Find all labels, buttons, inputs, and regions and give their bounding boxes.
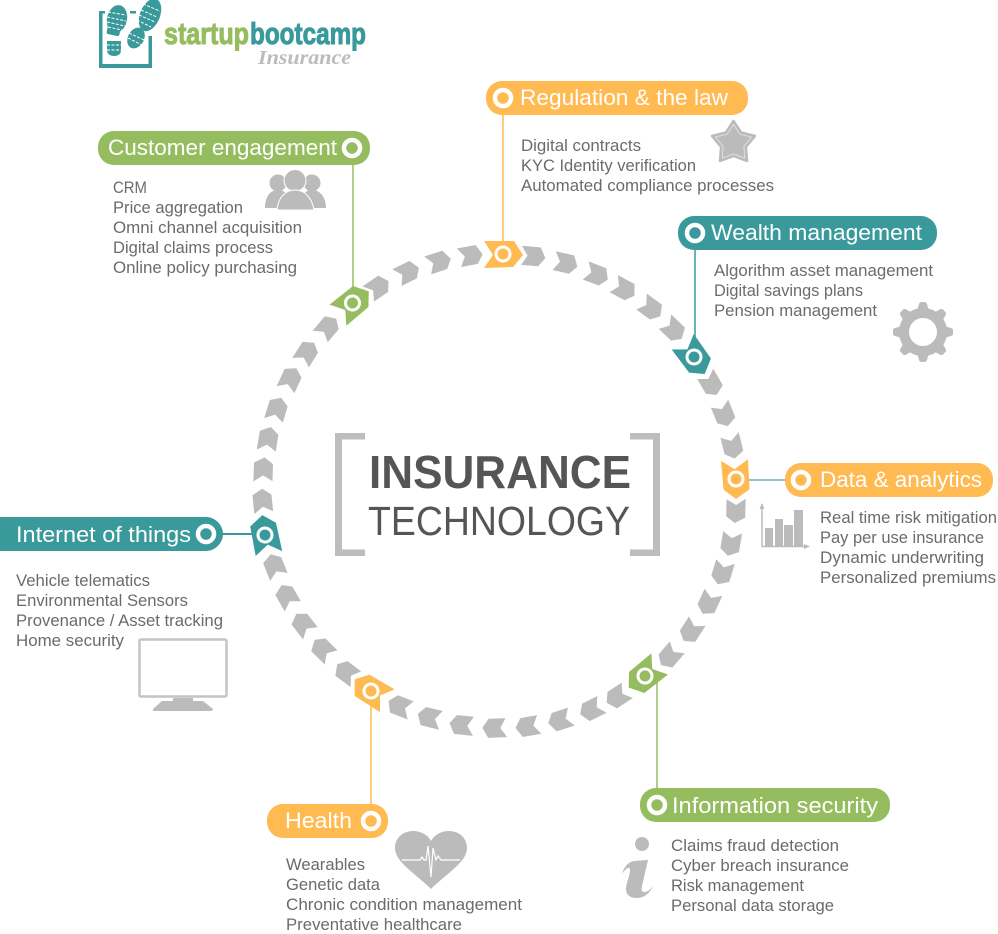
list bbox=[671, 836, 849, 915]
list: Digital savings plans bbox=[714, 281, 863, 300]
list bbox=[714, 261, 933, 320]
connector: data and analytics bbox=[742, 479, 790, 481]
list: Omni channel acquisition bbox=[113, 218, 302, 237]
logo wordmark startup: startup bbox=[164, 16, 249, 51]
pill heading: Information security bbox=[672, 793, 878, 818]
pill heading bbox=[678, 216, 937, 250]
pill heading: Internet of things bbox=[16, 522, 191, 547]
panel: information security bbox=[622, 788, 890, 915]
list: Algorithm asset management bbox=[714, 261, 933, 280]
ring marker: data and analytics bbox=[721, 459, 750, 500]
logo: startupbootcamp Insurance bbox=[99, 0, 366, 69]
pill heading bbox=[785, 463, 993, 497]
ring marker: customer engagement bbox=[330, 280, 377, 326]
pill heading bbox=[267, 804, 388, 838]
list bbox=[16, 571, 223, 650]
connector: wealth management bbox=[694, 245, 696, 345]
pill heading: Health bbox=[285, 808, 352, 833]
icon: info letter bbox=[622, 837, 653, 898]
list: Environmental Sensors bbox=[16, 591, 188, 610]
list bbox=[521, 136, 774, 195]
list: Home security bbox=[16, 631, 124, 650]
connector: internet of things bbox=[218, 533, 260, 535]
logo frame bbox=[99, 11, 152, 68]
pill heading: Customer engagement bbox=[108, 135, 337, 160]
pill heading bbox=[0, 517, 223, 551]
icon: bar chart bbox=[760, 503, 810, 549]
panel: wealth management bbox=[678, 216, 953, 362]
list: Automated compliance processes bbox=[521, 176, 774, 195]
icon: people bbox=[265, 170, 326, 210]
list: Genetic data bbox=[286, 875, 381, 894]
connector: customer engagement bbox=[352, 160, 354, 295]
ring marker: wealth management bbox=[672, 334, 716, 381]
circular chevron ring bbox=[252, 244, 747, 738]
list: Vehicle telematics bbox=[16, 571, 150, 590]
list: Digital claims process bbox=[113, 238, 273, 257]
list: Claims fraud detection bbox=[671, 836, 839, 855]
list: Real time risk mitigation bbox=[820, 508, 997, 527]
pill heading: Regulation & the law bbox=[520, 85, 728, 110]
list bbox=[820, 508, 997, 587]
list: Provenance / Asset tracking bbox=[16, 611, 223, 630]
list bbox=[113, 178, 302, 277]
list: Chronic condition management bbox=[286, 895, 522, 914]
ring marker: regulation bbox=[484, 241, 523, 268]
icon: heart with pulse bbox=[395, 831, 467, 889]
pill heading bbox=[98, 131, 370, 165]
pill heading bbox=[486, 81, 748, 115]
list: Cyber breach insurance bbox=[671, 856, 849, 875]
icon: monitor bbox=[140, 640, 226, 711]
list: CRM bbox=[113, 178, 147, 197]
title: TECHNOLOGY: TECHNOLOGY bbox=[368, 498, 630, 544]
list: Risk management bbox=[671, 876, 804, 895]
panel: data and analytics bbox=[760, 463, 997, 587]
left bracket bbox=[335, 433, 365, 556]
panel: customer engagement bbox=[98, 131, 370, 277]
list: KYC Identity verification bbox=[521, 156, 696, 175]
list: Pension management bbox=[714, 301, 877, 320]
panel: health bbox=[267, 804, 522, 934]
list: Price aggregation bbox=[113, 198, 243, 217]
list: Dynamic underwriting bbox=[820, 548, 984, 567]
logo subtitle Insurance: Insurance bbox=[257, 47, 351, 69]
logo wordmark bootcamp: bootcamp bbox=[250, 16, 366, 51]
list: Preventative healthcare bbox=[286, 915, 462, 934]
ring marker: internet of things bbox=[249, 513, 282, 556]
pill heading bbox=[640, 788, 890, 822]
list: Wearables bbox=[286, 855, 365, 874]
ring marker: information security bbox=[621, 653, 668, 699]
icon: gear bbox=[893, 302, 953, 362]
title: INSURANCE: INSURANCE bbox=[369, 446, 631, 498]
logo boot prints bbox=[104, 0, 166, 56]
connector: health bbox=[370, 695, 372, 808]
right bracket bbox=[630, 433, 660, 556]
pill heading: Wealth management bbox=[711, 220, 922, 245]
center title block bbox=[335, 433, 660, 556]
list: Pay per use insurance bbox=[820, 528, 984, 547]
connector: regulation bbox=[502, 110, 504, 245]
pill heading: Data & analytics bbox=[820, 467, 982, 492]
panel: internet of things bbox=[0, 517, 226, 711]
list: Online policy purchasing bbox=[113, 258, 297, 277]
panel: regulation and the law bbox=[486, 81, 774, 195]
list: Personal data storage bbox=[671, 896, 834, 915]
ring marker: health bbox=[347, 668, 395, 712]
connector: information security bbox=[656, 680, 658, 792]
list bbox=[286, 855, 522, 934]
icon: star bbox=[712, 121, 755, 161]
list: Digital contracts bbox=[521, 136, 641, 155]
list: Personalized premiums bbox=[820, 568, 996, 587]
